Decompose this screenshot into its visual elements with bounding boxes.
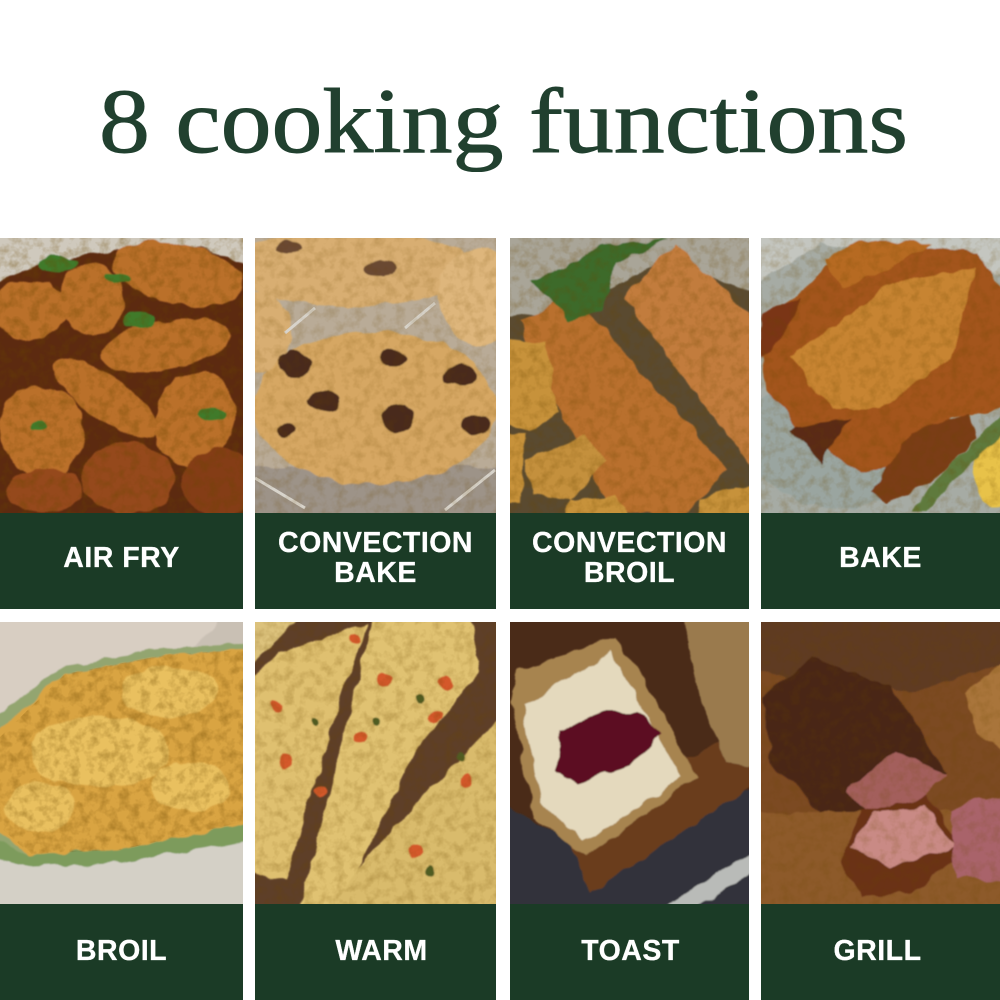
label: bake: BAKE bbox=[839, 542, 922, 574]
label: grill: GRILL bbox=[834, 934, 922, 966]
label: warm bbox=[255, 904, 496, 1000]
label: toast: TOAST bbox=[581, 934, 680, 966]
panel: grill bbox=[761, 622, 1000, 1000]
label: convection broil: CONVECTION bbox=[532, 526, 727, 558]
label: toast bbox=[510, 904, 749, 1000]
panel: convection bake bbox=[255, 238, 496, 609]
label: grill bbox=[761, 904, 1000, 1000]
label: convection bake: CONVECTION bbox=[278, 526, 473, 558]
label: convection broil: BROIL bbox=[584, 556, 675, 588]
panel: warm bbox=[255, 622, 496, 1000]
photo: toast with jam bbox=[510, 622, 749, 904]
label: air fry bbox=[0, 513, 243, 609]
photo: flatbread bbox=[255, 622, 496, 904]
label: bake bbox=[761, 513, 1000, 609]
label: air fry: AIR FRY bbox=[63, 542, 180, 574]
label: convection bake bbox=[255, 513, 496, 609]
photo: roast chicken bbox=[761, 238, 1000, 513]
photo: salmon and potatoes bbox=[510, 238, 749, 513]
panel: toast bbox=[510, 622, 749, 1000]
label: convection broil bbox=[510, 513, 749, 609]
photo: macaroni and cheese bbox=[0, 622, 243, 904]
panel: bake bbox=[761, 238, 1000, 609]
title: 8 cooking functions bbox=[99, 70, 908, 172]
panel: convection broil bbox=[510, 238, 749, 609]
panel: air fry bbox=[0, 238, 243, 609]
photo: grilled steak bbox=[761, 622, 1000, 904]
label: convection bake: BAKE bbox=[334, 556, 417, 588]
photo: chicken wings bbox=[0, 238, 243, 513]
photo: cookies bbox=[255, 238, 496, 513]
label: broil: BROIL bbox=[76, 934, 167, 966]
label: warm: WARM bbox=[335, 934, 428, 966]
panel: broil bbox=[0, 622, 243, 1000]
label: broil bbox=[0, 904, 243, 1000]
